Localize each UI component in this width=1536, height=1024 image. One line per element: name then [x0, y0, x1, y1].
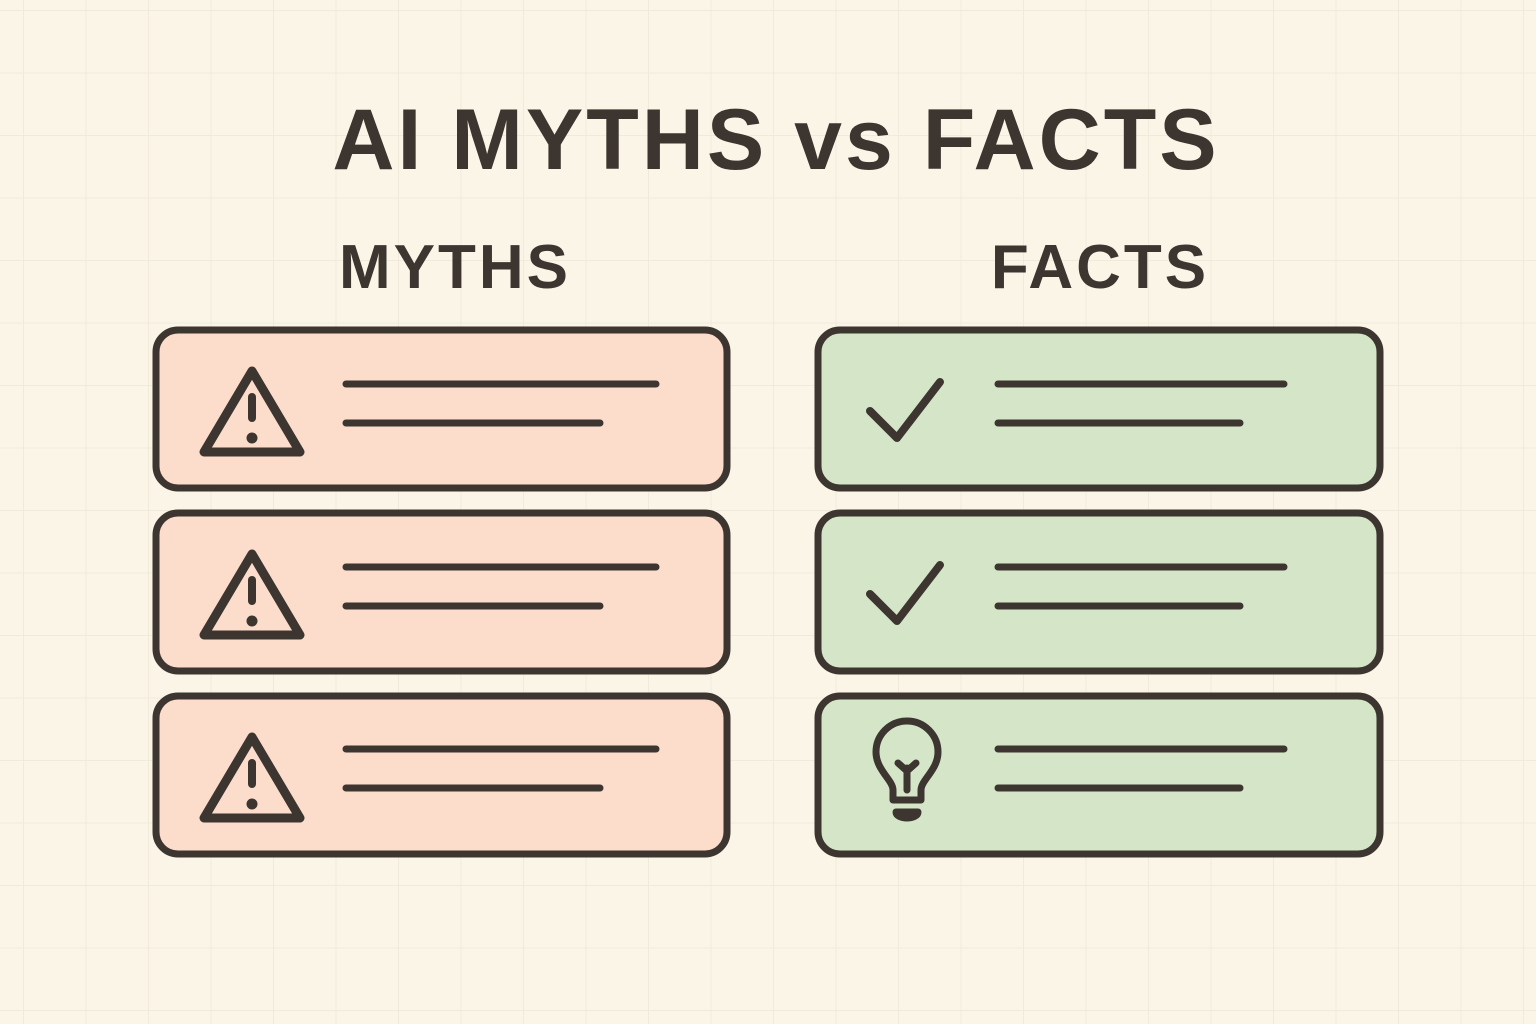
fact card 2	[818, 513, 1380, 671]
fact card 3 with lightbulb	[818, 696, 1380, 854]
panel: facts column	[818, 330, 1380, 854]
title: AI MYTHS vs FACTS	[332, 92, 1220, 188]
panel: myths column	[156, 330, 727, 854]
heading: facts: FACTS	[991, 233, 1209, 302]
myth card 2	[156, 513, 727, 671]
myth card 1	[156, 330, 727, 488]
heading: myths: MYTHS	[339, 233, 571, 302]
myth card 3	[156, 696, 727, 854]
fact card 1	[818, 330, 1380, 488]
